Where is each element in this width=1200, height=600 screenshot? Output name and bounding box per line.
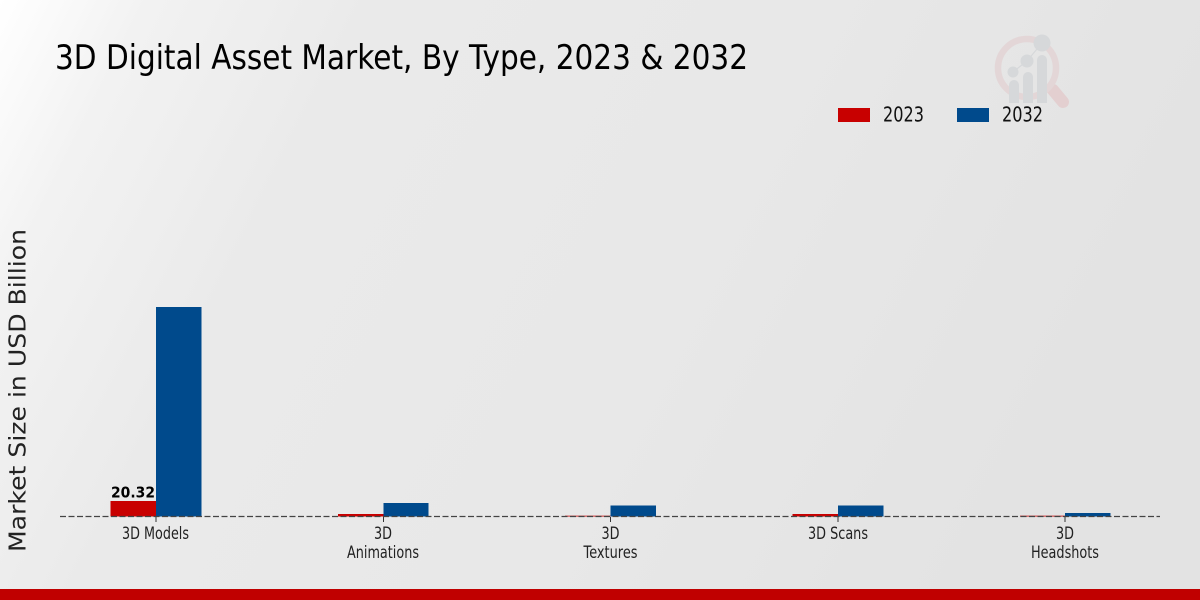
bars: 3D Headshots (1020, 513, 1110, 516)
bars: 3D Textures (565, 506, 656, 516)
footer band (0, 589, 1200, 600)
data label: 20.32: 20.32 (111, 484, 155, 502)
category labels: Headshots (1031, 543, 1099, 563)
legend item: 2023 (838, 102, 924, 126)
legend item: 2032: 2032 (1002, 102, 1043, 126)
category labels: Textures (583, 543, 638, 563)
category labels: Animations (347, 543, 419, 563)
legend item: 2023: 2023 (883, 102, 924, 126)
axis ticks (156, 517, 1065, 522)
category labels (122, 524, 1099, 563)
baseline dashed axis (60, 516, 1160, 518)
bars: 3D Animations (338, 503, 428, 516)
label: 3D Textures: 3D (602, 524, 620, 544)
label: 3D Animations: 3D (374, 524, 392, 544)
label: 3D Headshots: 3D (1056, 524, 1074, 544)
bar chart (60, 307, 1160, 563)
legend item: 2032 (957, 102, 1043, 126)
title: 3D Digital Asset Market, By Type, 2023 & 2032 (55, 38, 748, 78)
bars: 3D Scans (792, 506, 884, 516)
y-axis label: Market Size in USD Billion (4, 229, 32, 552)
bars: 3D Models (110, 307, 202, 516)
label: 3D Scans: 3D Scans (808, 524, 868, 544)
label: 3D Models: 3D Models (122, 524, 189, 544)
icon: magnifier watermark logo (998, 34, 1063, 103)
legend (838, 102, 1043, 126)
